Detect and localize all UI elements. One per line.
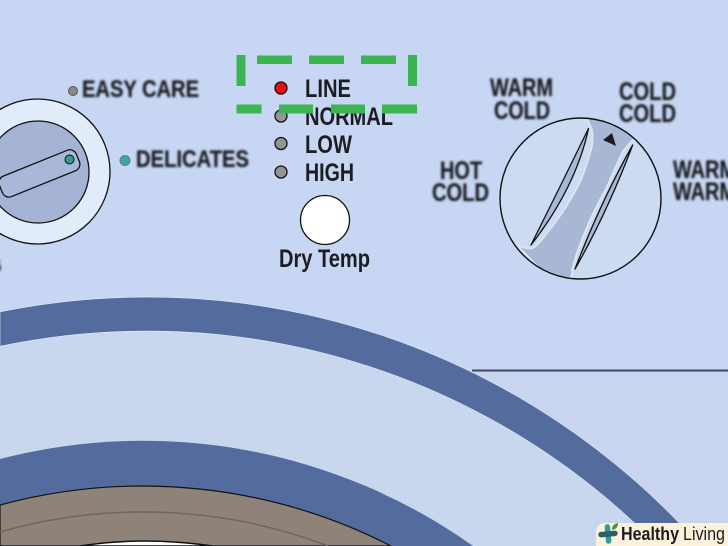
water temperature dial: [500, 116, 661, 290]
left grip slot: [531, 128, 588, 245]
delicates text: DELICATES: [136, 146, 249, 173]
label: warm cold: [490, 74, 553, 125]
label: delicates: [120, 146, 249, 173]
left cycle dial: [0, 99, 110, 244]
panel seam line: [472, 370, 728, 372]
normal text: NORMAL: [305, 103, 393, 131]
label: warm warm: [673, 156, 728, 206]
dial indicator dot: [65, 155, 74, 164]
logo: Healthy Living: [596, 523, 728, 546]
dry temp label: Dry Temp: [279, 245, 370, 273]
dial handle: [0, 148, 82, 199]
label: cold cold: COLD: [619, 78, 676, 106]
label: hot cold: HOT: [440, 157, 482, 185]
low text: LOW: [305, 131, 352, 159]
white drum opening: [80, 541, 213, 546]
label: warm cold: COLD: [494, 97, 550, 125]
label: hot cold: COLD: [432, 179, 489, 207]
lower right door panel: [472, 371, 728, 546]
easy care text: EASY CARE: [82, 76, 199, 103]
logo text healthy: Healthy: [621, 524, 679, 544]
low indicator light: [275, 138, 287, 150]
line indicator light: [275, 82, 287, 94]
logo icon: leaf: [612, 523, 618, 530]
label: easy care: [68, 76, 199, 103]
brown drum rim: [0, 486, 391, 546]
logo background: [596, 523, 728, 546]
high indicator light: [275, 166, 287, 178]
dry temperature selector: [275, 75, 393, 273]
line text: LINE: [305, 75, 351, 103]
label: warm cold: WARM: [490, 74, 553, 102]
normal indicator light: [275, 110, 287, 122]
pointer triangle: [603, 133, 616, 146]
label: cold cold: [619, 78, 676, 128]
dial inner disc: [0, 121, 89, 223]
dial disc: [500, 118, 661, 279]
dial outline: [500, 118, 661, 279]
door glass area inside ring: [0, 331, 658, 546]
rim groove: [0, 512, 328, 546]
dial outer ring: [0, 99, 110, 244]
dial grip band: [516, 119, 634, 278]
easy care dot: [68, 86, 78, 96]
high text: HIGH: [305, 159, 354, 187]
outer blue door ring: [0, 297, 701, 546]
delicates dot: [120, 156, 130, 166]
label: cold cold: COLD: [619, 100, 676, 128]
label: hot cold: [432, 157, 489, 207]
right grip slot: [575, 145, 633, 269]
green dashed highlight box: [236, 55, 417, 114]
dry temp knob: [300, 196, 350, 244]
inner door ring: [0, 441, 473, 546]
logo icon: plus: [600, 526, 616, 542]
blue inner ring band: [0, 441, 473, 546]
